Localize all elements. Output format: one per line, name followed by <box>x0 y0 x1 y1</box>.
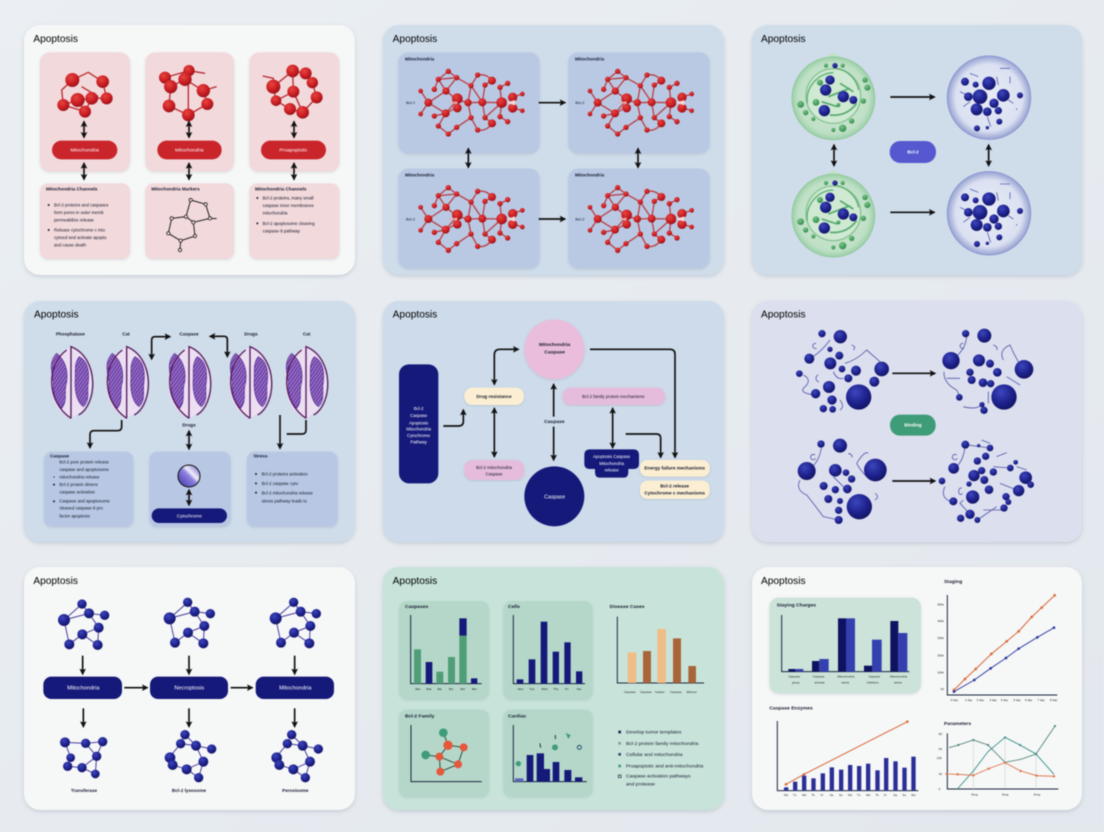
legend: Proapoptotic and anti-mitochondria <box>626 764 704 770</box>
pill 2: Necroptosis <box>174 686 204 692</box>
chart: bars with trend line: Sa <box>830 793 834 797</box>
heading: Apoptosis <box>34 309 79 320</box>
card: bottom-right network: Bcl-2 <box>575 216 585 221</box>
panel: mitochondria row <box>24 301 355 542</box>
heading: Apoptosis <box>33 576 78 587</box>
navy node <box>584 449 639 478</box>
detail card 3: Bcl-2 apoptosome cleaving <box>263 221 315 226</box>
chart: network plot: Bcl-2 Family <box>405 714 435 720</box>
navy node: release <box>605 468 619 473</box>
heading: Apoptosis <box>761 576 806 587</box>
card: right text: Bcl-2 proteins activation <box>262 472 308 477</box>
molecule bottom 2 <box>165 730 216 782</box>
chart: stacked bars: Bid <box>437 687 442 691</box>
arrows between cards <box>468 103 638 219</box>
chart: two rising lines: 200k <box>937 653 944 657</box>
column 1: molecule card <box>40 52 130 172</box>
chart: grouped bars: Staying Charges <box>777 603 816 609</box>
arrows <box>834 97 989 212</box>
column 2: molecule card <box>145 52 234 172</box>
detail card 2 with line molecule: Mitochondria Markers <box>151 186 200 191</box>
cream pill right top <box>640 460 710 477</box>
chart: tan and brown bars <box>610 604 704 694</box>
chart: navy bars: Cells <box>508 604 520 610</box>
chart: two rising lines: 8 day <box>1050 698 1058 702</box>
detail card 2 with line molecule <box>145 183 234 259</box>
navy column <box>399 364 438 483</box>
chart: crossing lines: Drug <box>971 792 978 796</box>
pill 3: Mitochondria <box>279 686 312 692</box>
card: top-left network: Bcl-2 <box>406 100 416 105</box>
chart: stacked bars: Mcl <box>460 687 465 691</box>
chart: crossing lines: 60 <box>939 747 942 751</box>
icon: mitochondrion 2 <box>106 347 148 418</box>
chart: two rising lines: 400k <box>937 619 944 623</box>
card: top-right network: Bcl-2 <box>575 100 585 105</box>
cream pill right bottom <box>640 481 710 499</box>
heading: Apoptosis <box>393 309 437 320</box>
arrows <box>892 373 935 481</box>
panel: blue clusters <box>752 301 1082 542</box>
navy column: Pathway <box>410 440 428 445</box>
detail card 3: mitochondria <box>263 211 288 216</box>
chart: stacked bars: Bim <box>472 687 478 691</box>
column 2: molecule card: Mitochondria <box>175 148 204 154</box>
panel: flow diagram <box>383 301 724 542</box>
navy node: Apoptosis Caspase <box>593 454 631 459</box>
card: bottom-left network: Mitochondria <box>405 173 435 178</box>
column labels: Caspase <box>179 332 199 337</box>
card: bottom-left network <box>398 169 540 268</box>
chart: grouped bars: Mitochondria <box>890 674 907 678</box>
chart: bars with trend line: Mo <box>911 793 916 797</box>
column labels: Drugs <box>244 332 258 337</box>
cream pill right bottom: Cytochrome c mechanisms <box>644 490 705 495</box>
pill 1: Mitochondria <box>67 686 100 692</box>
card: top-right network: Mitochondria <box>575 56 605 61</box>
column 3: molecule card <box>249 52 339 172</box>
pink circle: Mitochondria <box>539 342 571 348</box>
molecule top 3 <box>270 598 321 648</box>
molecule bottom 3 <box>271 730 323 782</box>
heading: Apoptosis <box>33 34 78 45</box>
chart: crossing lines: 0 <box>939 787 941 791</box>
chart: tan and brown bars: Caspase <box>640 690 652 694</box>
chart: two rising lines: 4 day <box>1001 698 1008 702</box>
card: left text: caspase activation <box>59 489 96 494</box>
molecule top 2 <box>164 598 215 648</box>
detail card 3: caspase-9 pathway <box>263 228 301 233</box>
pill 2 <box>150 677 228 699</box>
chart: grouped bars: Caspase <box>868 674 880 678</box>
card: right text: Bcl-2 caspase cyto <box>262 481 299 486</box>
chart: navy bars: Sat <box>577 687 581 691</box>
navy circle: Caspase <box>544 494 565 500</box>
chart: two rising lines: 0 day <box>951 698 958 702</box>
chart: navy bars <box>503 601 593 699</box>
detail card 3 <box>249 183 339 259</box>
chart: grouped bars: Caspase <box>788 674 800 678</box>
detail card 1: permeabilize release <box>54 217 95 222</box>
column labels: Cat <box>303 331 311 336</box>
chart: crossing lines: 40 <box>939 772 942 776</box>
detail card 1 <box>40 183 130 259</box>
detail card 3: Mitochondria Channels <box>255 186 307 191</box>
chart: grouped bars <box>769 598 921 693</box>
card: right text: Stress <box>253 453 268 458</box>
flow arrows <box>83 656 295 727</box>
chart: two rising lines: 0k <box>941 687 944 691</box>
chart: bars with trend line: Caspase Enzymes <box>769 706 813 712</box>
chart: bars with trend line: Su <box>902 793 906 797</box>
cream pill <box>464 388 524 405</box>
chart: grouped bars: stress <box>894 680 902 684</box>
pink pill lower: Bcl-2 mitochondria <box>476 465 513 470</box>
detail card 1: Release cytochrome c into <box>54 228 106 233</box>
chart: bars with trend line: Sa <box>893 793 897 797</box>
cream pill right bottom: Bcl-2 release <box>660 483 689 488</box>
chart: navy bars: Tue <box>529 687 535 691</box>
chart: bars with trend line: Tu <box>793 793 797 797</box>
pink pill lower <box>464 460 524 480</box>
chart: tan and brown bars: Disease Cases <box>610 604 645 610</box>
pink wide pill: Bcl-2 family protein mechanisms <box>582 394 644 399</box>
pink wide pill <box>563 388 665 405</box>
heading: Apoptosis <box>761 309 806 320</box>
chart: crossing lines: 80 <box>939 732 942 736</box>
pink circle: Caspase <box>544 349 565 355</box>
pill label <box>890 415 936 436</box>
chart: two rising lines: 300k <box>937 636 944 640</box>
chart: two rising lines: 100k <box>937 670 944 674</box>
pink circle <box>524 319 584 379</box>
card: left text: cleaved caspase-9 pro <box>59 506 103 511</box>
chart: two rising lines: Staging <box>944 579 962 585</box>
arrows to detail cards <box>84 163 294 179</box>
navy column: Mitochondria <box>406 426 432 431</box>
card: left text: Bcl-2 pore protein release <box>59 460 109 465</box>
cluster bottom-right <box>939 440 1034 523</box>
chart: bars with trend line: Fr <box>821 793 823 797</box>
navy circle <box>524 466 584 526</box>
card: left text: factor apoptosis <box>59 513 90 518</box>
card: centre with lens and pill: Cytochrome <box>177 514 202 519</box>
heading: Apoptosis <box>393 34 437 45</box>
chart: bars with trend line: Mo <box>784 793 788 797</box>
icon: blue sphere bottom <box>947 172 1031 255</box>
molecule captions: Bcl-2 lysosome <box>172 788 206 793</box>
chart: stacked bars <box>399 601 489 699</box>
legend: Cellular and mitochondria <box>626 752 683 758</box>
chart: grouped bars: stress <box>841 680 850 684</box>
panel: cell to sphere transitions <box>752 25 1082 275</box>
chart: grouped bars: Caspase <box>813 674 825 678</box>
card: top-left network <box>398 52 540 153</box>
chart: navy bars: Thu <box>553 687 559 691</box>
chart: grouped bars: activate <box>814 680 825 684</box>
chart: stacked bars: Bax <box>415 687 421 691</box>
card: left text: caspase and apoptosome <box>59 467 109 472</box>
pink pill lower: Caspase <box>485 471 503 476</box>
chart: tan and brown bars: Effector <box>687 690 697 694</box>
molecule captions: Transferase <box>71 788 97 793</box>
legend <box>618 730 704 788</box>
chart: navy bars: Wed <box>541 687 548 691</box>
label: caspase: Caspase <box>544 419 565 425</box>
panel: mixed line and bar charts <box>752 567 1082 810</box>
pill 3 <box>256 677 334 699</box>
pill label: Binding <box>904 422 922 427</box>
chart: two rising lines: 5 day <box>1013 698 1021 702</box>
detail card 1: Mitochondria Channels <box>46 186 98 191</box>
icon: mitochondrion 4 <box>230 347 272 418</box>
card: left text: Bcl-2 protein dimers <box>59 482 98 487</box>
chart: bars with icons: Cardiac <box>508 714 527 720</box>
molecule bottom 1 <box>60 737 107 778</box>
chart: stacked bars: Bcl <box>449 687 453 691</box>
chart: bars with trend line <box>769 706 918 797</box>
molecule captions <box>71 788 309 793</box>
chart: crossing lines: Parameters <box>944 721 971 727</box>
molecule captions: Peroxisome <box>282 788 309 793</box>
column labels: Phosphatase <box>56 332 85 337</box>
cluster top-left <box>796 330 889 413</box>
chart: two rising lines: 2 day <box>977 698 984 702</box>
cluster top-right <box>942 329 1033 414</box>
cream pill: Drug resistance <box>476 394 512 399</box>
cluster bottom-left <box>798 439 887 524</box>
chart: grouped bars: group <box>792 680 800 684</box>
heading: Apoptosis <box>761 34 806 45</box>
molecule top 1 <box>58 599 109 650</box>
icon: mitochondrion 1 <box>51 347 93 418</box>
card: bottom-left network: Bcl-2 <box>406 216 416 221</box>
pill label: Bcl-2 <box>907 149 919 154</box>
navy column: Caspase <box>410 413 428 418</box>
column 3: molecule card: Proapoptotic <box>279 148 308 154</box>
chart: tan and brown bars: Initiator <box>655 690 665 694</box>
column labels <box>56 331 311 337</box>
detail card 3: Bcl-2 proteins, many small <box>263 196 313 201</box>
chart: grouped bars: inhibitors <box>867 680 879 684</box>
column 1: molecule card: Mitochondria <box>70 148 99 154</box>
chart: two rising lines: 500k <box>937 602 944 606</box>
card: centre with lens and pill <box>149 452 231 527</box>
card: left text <box>44 452 133 527</box>
card: left text: mitochondria release <box>59 474 100 479</box>
chart: bars with trend line: Mo <box>848 793 852 797</box>
chart: grouped bars: Mitochondria <box>837 674 855 678</box>
card: bottom-right network <box>568 169 710 268</box>
legend: and protease <box>626 782 655 788</box>
detail card 1: and cause death <box>54 243 87 248</box>
chart: bars with trend line: Su <box>839 793 843 797</box>
navy column: Apoptosis <box>409 420 428 425</box>
chart: two rising lines: 6 day <box>1025 698 1033 702</box>
panel: green charts <box>383 567 724 810</box>
chart: bars with trend line: Th <box>811 793 815 797</box>
chart: crossing lines <box>937 721 1058 796</box>
column labels: Cat <box>122 331 130 336</box>
panel: blue molecule flow <box>24 567 355 810</box>
chart: two rising lines: 3 day <box>989 698 997 702</box>
detail card 3: caspase inner membranes <box>263 203 314 208</box>
navy node: Mitochondria <box>599 461 625 466</box>
chart: bars with trend line: Th <box>875 793 879 797</box>
detail card 1: Bcl-2 proteins and caspases <box>54 202 108 207</box>
chart: bars with trend line: We <box>802 793 807 797</box>
detail card 1: cytosol and activate apopto <box>54 235 107 240</box>
chart: stacked bars: Bak <box>426 687 432 691</box>
pill label <box>890 141 936 163</box>
connector arrows <box>90 336 306 449</box>
card: right text: stress pathway leads to <box>262 498 307 503</box>
chart: bars with trend line: Fr <box>884 793 887 797</box>
panel: red networks grid <box>383 25 724 275</box>
panel: mitochondria red molecules <box>24 25 355 275</box>
chart: tan and brown bars: Caspase <box>670 690 682 694</box>
chart: navy bars: Fri <box>565 687 569 691</box>
legend: Caspase activation pathways <box>626 774 691 780</box>
legend: Bcl-2 protein family mitochondria <box>626 741 699 747</box>
chart: bars with trend line: Tu <box>857 793 861 797</box>
chart: network plot <box>399 709 489 797</box>
chart: navy bars: Mon <box>518 687 524 691</box>
label: drugs: Drugs <box>182 422 196 427</box>
pill 1 <box>43 677 122 699</box>
chart: bars with icons <box>503 709 593 797</box>
heading: Apoptosis <box>393 576 437 587</box>
navy column: Bcl-2 <box>414 406 424 411</box>
icon: mitochondrion 3 <box>169 347 211 418</box>
card: left text: Caspase <box>50 453 70 458</box>
chart: two rising lines: 7 day <box>1037 698 1045 702</box>
chart: two rising lines: 1 day <box>965 698 973 702</box>
legend: Develop tumor templates <box>626 730 682 736</box>
card: left text: Caspase and apoptosome <box>59 498 110 503</box>
chart: tan and brown bars: Caspase <box>624 690 636 694</box>
icon: green cell top <box>792 53 875 140</box>
detail card 1: form pores in outer memb <box>54 210 104 215</box>
icon: blue sphere top <box>947 56 1031 139</box>
chart: crossing lines: 100 <box>937 756 942 760</box>
card: bottom-right network: Mitochondria <box>575 173 605 178</box>
icon: green cell bottom <box>792 170 875 257</box>
icon: mitochondrion 5 <box>286 347 328 418</box>
card: right text <box>247 452 338 527</box>
arrows <box>443 349 675 460</box>
card: right text: Bcl-2 mitochondria release <box>262 490 313 495</box>
card: top-right network <box>568 52 710 153</box>
chart: stacked bars: Caspases <box>405 604 429 610</box>
cream pill right top: Energy failure mechanisms <box>644 466 705 471</box>
chart: bars with trend line: We <box>866 793 871 797</box>
chart: crossing lines: Drug <box>1034 792 1040 796</box>
card: top-left network: Mitochondria <box>405 56 435 61</box>
chart: crossing lines: Drug <box>1002 792 1009 796</box>
chart: two rising lines <box>937 579 1058 702</box>
navy column: Cytochrome <box>407 433 431 438</box>
